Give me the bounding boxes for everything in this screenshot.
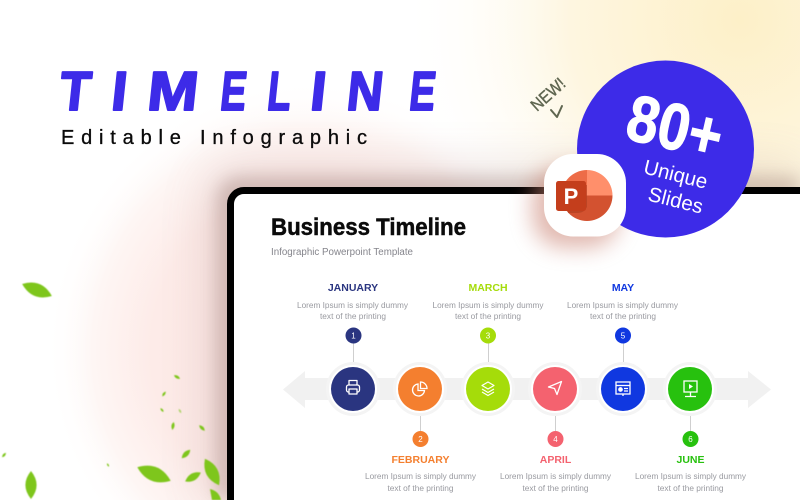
step: June: JUNE: [676, 454, 705, 466]
title: E: [407, 62, 439, 123]
step: May: 5: [621, 332, 626, 340]
icon: layers: [482, 382, 494, 396]
step: February: text of the printing: [388, 484, 454, 493]
subtitle: Editable Infographic: [61, 127, 367, 149]
step: April: text of the printing: [522, 484, 589, 493]
falling leaves: [1, 278, 224, 500]
purple badge: 80+ unique slides: 80+: [620, 80, 730, 173]
purple badge: 80+ unique slides: Unique: [641, 156, 710, 194]
title: N: [344, 61, 386, 123]
powerpoint icon shadow: [532, 166, 620, 248]
step: February: [365, 364, 477, 493]
powerpoint icon: P: [564, 184, 578, 209]
step: June: [635, 364, 747, 493]
step: March: text of the printing: [455, 312, 521, 321]
step: February: 2: [418, 435, 423, 444]
new label: NEW!: [527, 74, 569, 115]
icon: presentation board: [616, 382, 630, 396]
step: April: 4: [553, 435, 558, 444]
step: March: MARCH: [468, 282, 508, 294]
step: April: APRIL: [540, 454, 572, 466]
title: [57, 60, 439, 123]
handwritten arrow: [551, 106, 562, 117]
powerpoint icon: [544, 154, 626, 236]
title: T: [57, 61, 94, 122]
step: June: 6: [688, 435, 693, 444]
step: February: Lorem Ipsum is simply dummy: [365, 472, 477, 481]
icon: printer: [346, 380, 360, 394]
step: May: Lorem Ipsum is simply dummy: [567, 301, 679, 310]
purple badge: 80+ unique slides: [577, 60, 754, 238]
step: June: Lorem Ipsum is simply dummy: [635, 472, 747, 481]
tablet screen: [230, 190, 800, 500]
icon: pie chart: [413, 382, 427, 396]
icon: screen with play button: [684, 381, 697, 396]
tablet shadow: [227, 187, 800, 500]
slide heading: Business Timeline: [271, 214, 466, 241]
title: L: [265, 62, 295, 123]
step: January: Lorem Ipsum is simply dummy: [297, 301, 409, 310]
step: June: text of the printing: [658, 484, 724, 493]
step: March: 3: [486, 332, 491, 340]
step: May: [567, 282, 679, 414]
title: I: [109, 60, 131, 122]
step: March: Lorem Ipsum is simply dummy: [432, 301, 544, 310]
title: M: [145, 62, 201, 122]
title: I: [308, 60, 330, 122]
icon: send arrow: [548, 382, 562, 394]
timeline arrow band: [283, 371, 771, 408]
purple badge: 80+ unique slides: Slides: [646, 183, 705, 219]
step: February: FEBRUARY: [392, 454, 449, 466]
step: May: MAY: [612, 282, 634, 294]
step: May: text of the printing: [590, 312, 656, 321]
connector lines: [354, 343, 690, 431]
step: April: [500, 364, 612, 493]
step: April: Lorem Ipsum is simply dummy: [500, 472, 612, 481]
slide subheading: Infographic Powerpoint Template: [271, 247, 413, 258]
step: January: JANUARY: [328, 282, 378, 294]
title: E: [218, 62, 250, 123]
step: January: [297, 282, 409, 414]
step: January: 1: [351, 332, 356, 340]
step: January: text of the printing: [320, 312, 386, 321]
step: March: [432, 282, 544, 414]
